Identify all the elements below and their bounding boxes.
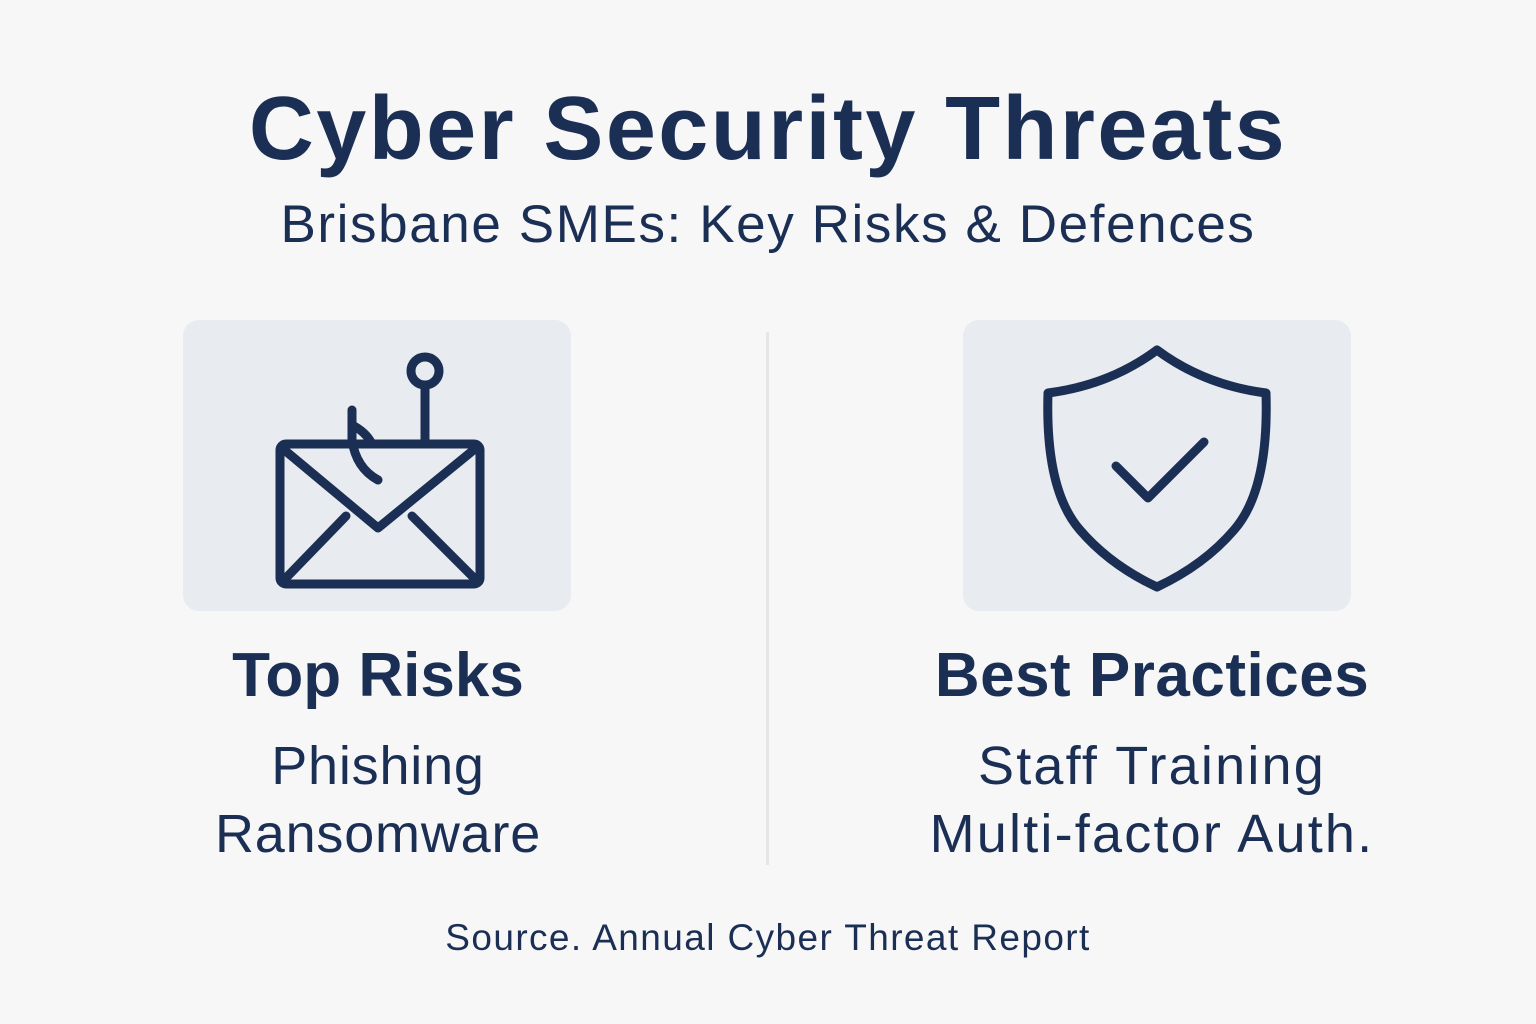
list: practices [930, 736, 1374, 864]
heading: top risks: Top Risks [232, 641, 524, 710]
source: Source. Annual Cyber Threat Report [445, 917, 1091, 958]
divider [766, 332, 769, 865]
list: practices: Staff Training [978, 736, 1326, 796]
icon: shield with check [1043, 345, 1271, 592]
heading: best practices: Best Practices [935, 641, 1369, 710]
panel: phishing icon [183, 320, 571, 611]
list: practices: Multi-factor Auth. [930, 804, 1374, 864]
list: risks: Ransomware [215, 804, 541, 864]
icon: envelope with hook [276, 352, 484, 588]
panel: shield icon [963, 320, 1351, 611]
list: risks: Phishing [271, 736, 485, 796]
column: best practices [930, 641, 1374, 864]
list: risks [215, 736, 541, 864]
subtitle: Brisbane SMEs: Key Risks & Defences [280, 195, 1256, 254]
title: Cyber Security Threats [249, 79, 1287, 179]
column: top risks [215, 641, 541, 864]
